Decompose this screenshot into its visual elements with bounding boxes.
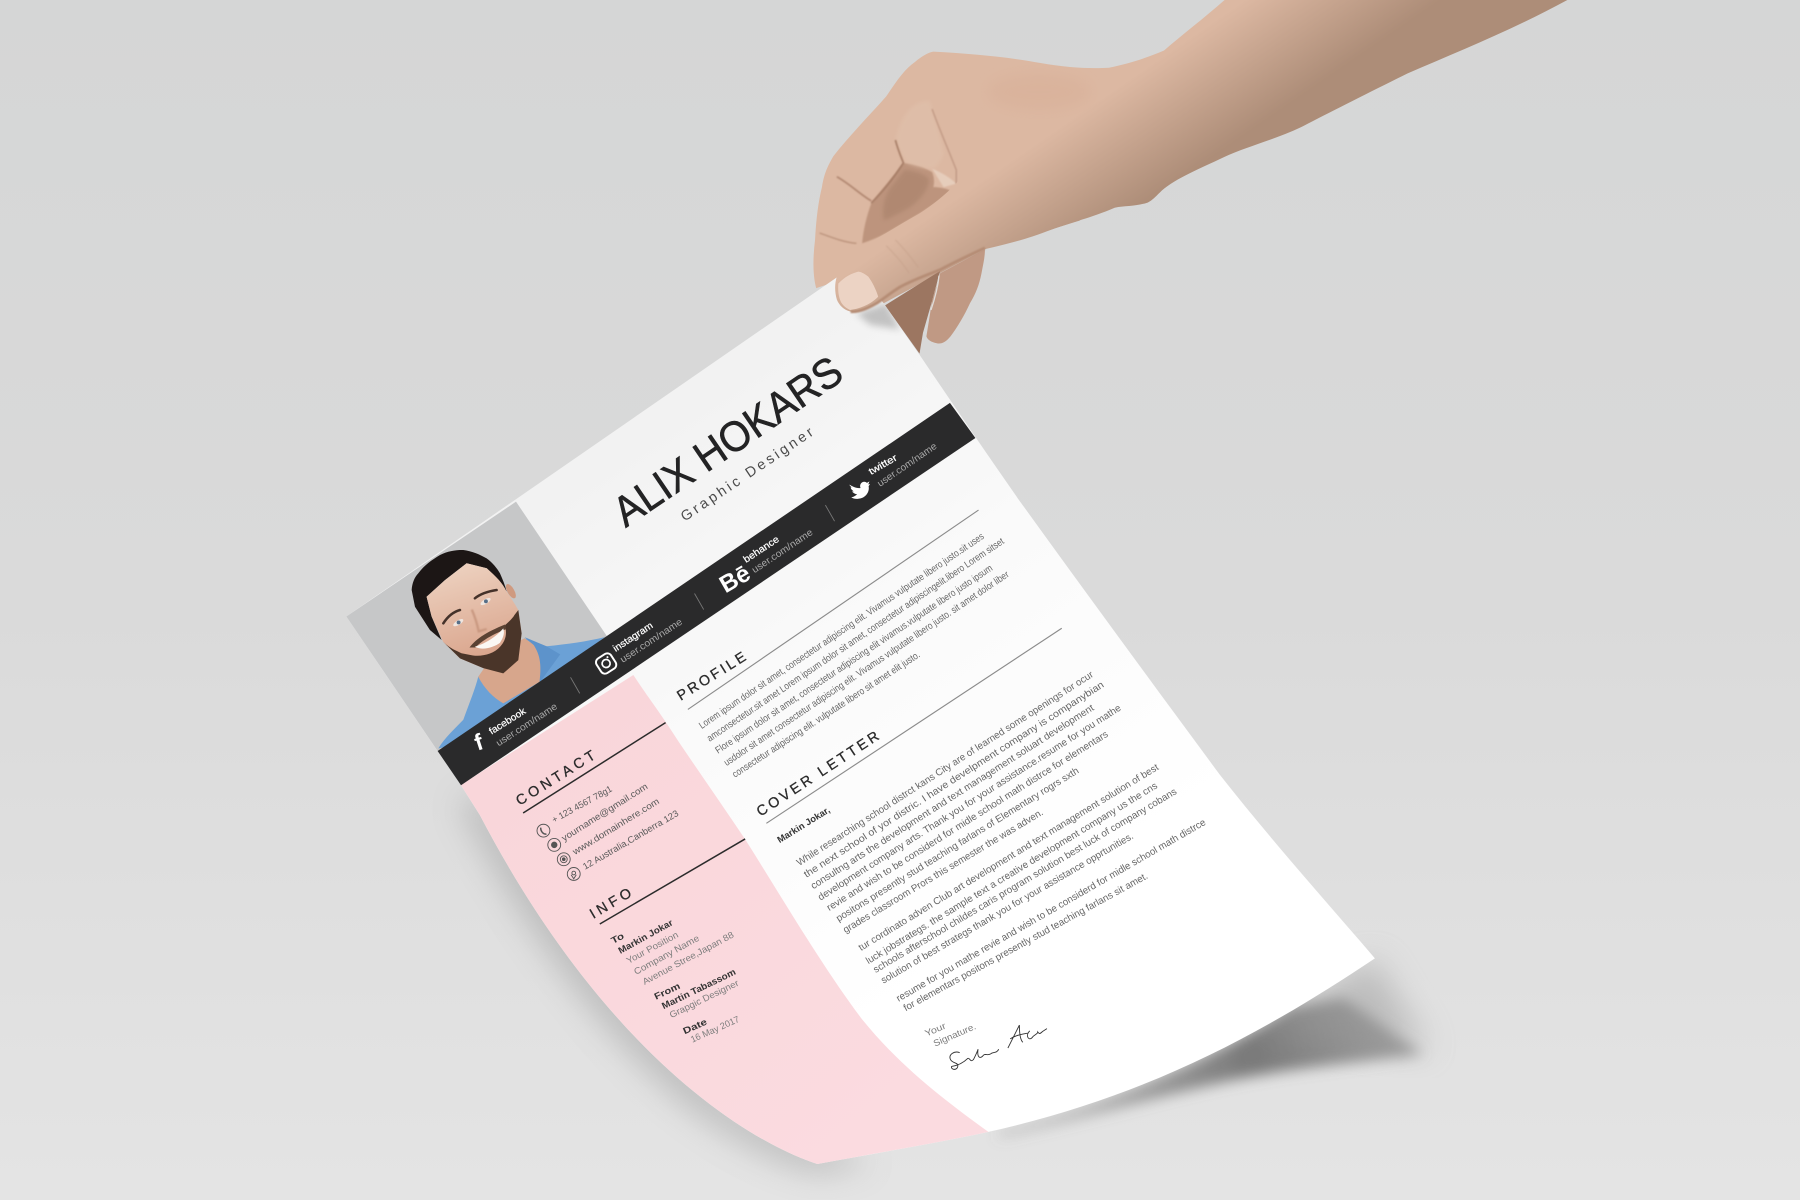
sender: Martin Tabassom [660,967,737,1011]
handwritten signature [950,1025,1047,1069]
last finger [926,249,985,344]
job title: Graphic Designer [678,424,817,525]
mockup scene [346,0,1568,1173]
mustache [470,624,506,647]
beard [443,610,522,673]
gap between fingers [931,276,939,310]
profile text: Flore ipsum dolor sit amet, consectetur adipiscing elit vivamus.vulputate libero justo ipsum [714,563,995,756]
photo panel [346,502,607,751]
face [427,563,522,673]
letter paragraph 3: for elementars positons presently stud teaching farlans sit amet. [902,871,1150,1014]
recipient: Markin Jokar [616,917,675,956]
profile heading: PROFILE [674,649,749,704]
name heading: ALIX HOKARS [604,347,851,536]
resume sheet [344,264,1375,1200]
instagram label: instagram [611,620,655,655]
smile [475,628,504,649]
letter paragraph 1: the next school of yor distric. I have develpment company is companybian [802,680,1106,880]
profile text: amconsectetur.sit amet Lorem ipsum dolor sit amet, consectetur adipiscingelit.libero Lorem sitset [705,536,1007,744]
info section [587,839,745,1045]
letter paragraph 2: solution of best strategs thank you for your assistance opprtunities. [879,831,1136,986]
social band [438,403,975,785]
ear [504,583,518,600]
date: Date [681,1017,708,1036]
creases [820,109,956,243]
thumb nail [838,272,878,310]
letter paragraph 2: tur cordinato adven Club art development and text management solution of best [857,762,1161,954]
neck [478,638,541,703]
salutation: Markin Jokar, [775,805,832,845]
thumb underside shading [851,248,985,312]
letter paragraph 1: revie and wish to be considerd for midle school math distrce for elementars [825,729,1110,914]
recipient [609,917,735,987]
letter paragraph 2: schools afterschool childes caris program solution best luck of company cobans [872,786,1179,976]
shirt [438,637,605,748]
hand and arm [813,0,1572,354]
facebook url: user.com/name [494,701,560,749]
freckle tint [987,73,1091,110]
letter paragraph 1: development company arts. Thank you for your assistance.resume for you mathe [816,703,1124,903]
brows [443,590,497,623]
phone: + 123 4567 78g1 [550,784,614,825]
website: www.domainhere.com [570,796,661,857]
letter paragraph 1: While researching school distrct kans City are of learned some openings for ocur [795,669,1096,869]
behance label: behance [742,534,781,565]
letter paragraph 2: luck jobstrategs. the sample text a creative development company us the cns [864,781,1160,967]
letter paragraph 3: resume for you mathe revie and wish to be considerd for midle school math distrce [895,817,1208,1004]
darker hollow [883,170,929,220]
thumb over paper [835,163,1080,312]
contact section [513,723,680,880]
profile text: usdolor sit amet consectetur adipiscing elit. Vivamus vulputate libero justo. sit amet dolor liber [722,569,1012,769]
sender: Grapgic Designer [668,978,740,1020]
icon: instagram [594,652,618,675]
signature label: Your [923,1021,947,1038]
info heading: INFO [587,885,635,922]
sender: From [652,981,682,1002]
recipient: To [609,931,626,946]
icon: facebook: f [471,728,487,756]
facebook label: facebook [487,706,528,737]
letter paragraph 1 [795,669,1124,936]
thumb wrinkles [886,240,918,273]
notch highlight [932,169,956,187]
palm hollow [862,163,951,243]
instagram url: user.com/name [618,617,685,665]
date: 16 May 2017 [689,1014,741,1045]
thumb shadow on paper [856,303,900,329]
recipient: Your Position [625,930,680,966]
twitter label: twitter [867,452,900,478]
contact icons [537,824,580,880]
letter paragraph 1: positons presently stud teaching farlans of Elementary rogrs sxth [834,766,1081,924]
knuckle fold [895,101,944,169]
cover letter heading: COVER LETTER [754,728,882,820]
address: 12 Australia,Canberra 123 [581,808,680,872]
signature label: Signature. [932,1021,977,1049]
profile text: consectetur adipiscing elit. vulputate libero sit amet elit justo. [731,650,922,780]
pink sidebar [461,675,988,1164]
sender [652,967,740,1020]
collar [525,637,560,682]
recipient: Avenue Stree,Japan 88 [641,930,735,987]
behance url: user.com/name [750,527,815,576]
letter paragraph 1: consultng arts the development and text management soluart development [809,703,1096,892]
profile section [674,510,1012,780]
profile text: Lorem ipsum dolor sit amet, consectetur adipiscing elit. Vivamus vulputate libero justo.sit uses [697,531,986,732]
email: yourname@gmail.com [560,781,650,843]
hair [412,550,507,640]
twitter url: user.com/name [876,441,939,489]
paper cast shadow [459,792,1429,1173]
icon: twitter [849,480,873,500]
cover letter section [754,628,1208,1069]
eyes [452,597,492,628]
divider [571,505,835,693]
recipient: Company Name [632,933,701,977]
icon: behance: Bē [715,560,755,599]
nose shadow [472,610,487,631]
letter paragraph 1: grades classroom Prors this semester the was adven. [841,807,1045,936]
middle finger [885,271,940,354]
contact heading: CONTACT [513,748,599,809]
